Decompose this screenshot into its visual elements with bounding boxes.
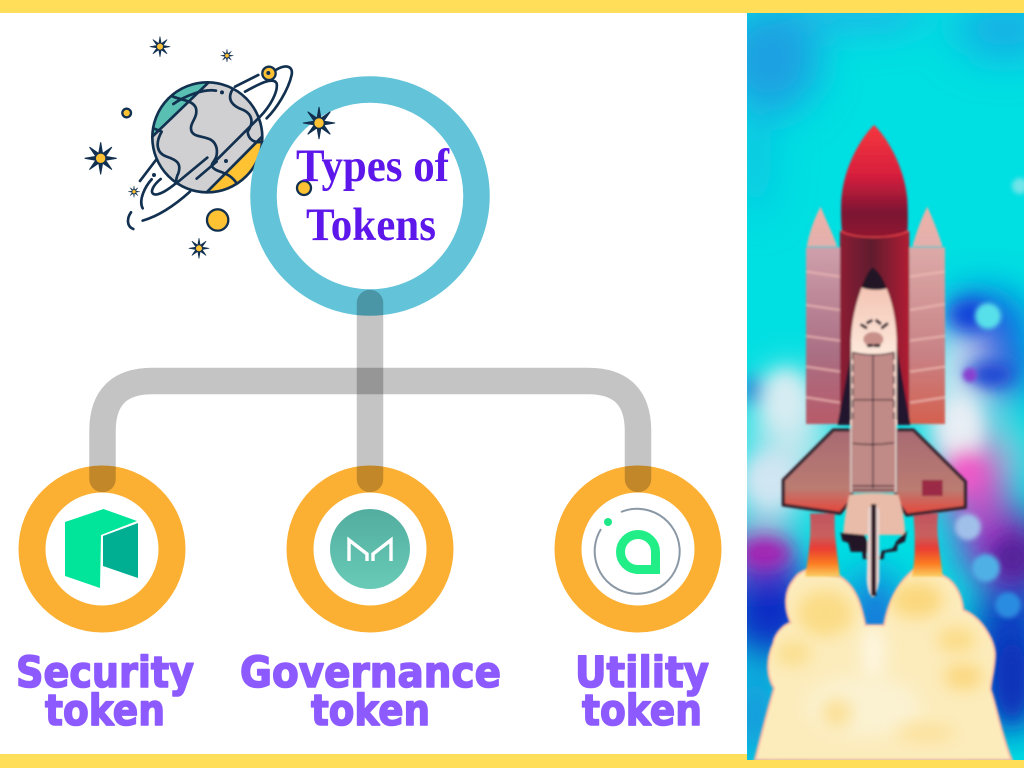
planet globe (152, 82, 262, 192)
title: Types of Tokens: Tokens (306, 199, 436, 251)
exhaust plume (755, 570, 1012, 760)
token ring: utility (568, 479, 708, 619)
token ring: security (32, 479, 172, 619)
icon: Siacoin logo (595, 509, 680, 594)
star overlapping title ring (297, 107, 335, 195)
tail fin stripe (870, 502, 878, 598)
main engines (842, 534, 905, 558)
orbiter wings (783, 430, 965, 515)
token ring: governance (300, 479, 440, 619)
icon: NEO logo (65, 509, 138, 588)
orbiter aft body (843, 420, 905, 535)
rocket upper section (806, 125, 945, 425)
planet ring and moon (128, 66, 292, 229)
label: Security token: token (45, 686, 165, 736)
photo panel: rocket launch (747, 13, 1024, 760)
bottom yellow border (0, 754, 1024, 768)
label: Utility token: Utility (575, 648, 709, 698)
top yellow border (0, 0, 1024, 13)
title ring (264, 90, 476, 302)
booster flames (805, 513, 943, 577)
connector: horizontal branch (102, 381, 638, 479)
label: Utility token: token (582, 686, 702, 736)
external tank (840, 125, 909, 425)
orbiter fuselage (837, 267, 911, 425)
rocket lower section (783, 420, 965, 597)
label: Governance token: token (311, 686, 430, 736)
label: Security token: Security (16, 648, 194, 698)
illustration: ringed planet with stars (85, 37, 292, 258)
connector: vertical stem (357, 303, 383, 479)
icon: Maker logo (330, 509, 410, 589)
photo background bokeh (747, 13, 1024, 760)
stars and small planets (85, 37, 233, 258)
booster: left (806, 207, 840, 424)
booster: right (909, 207, 945, 424)
label: Governance token: Governance (240, 648, 501, 698)
title: Types of Tokens: Types of (296, 140, 450, 192)
tail fin (867, 505, 879, 597)
